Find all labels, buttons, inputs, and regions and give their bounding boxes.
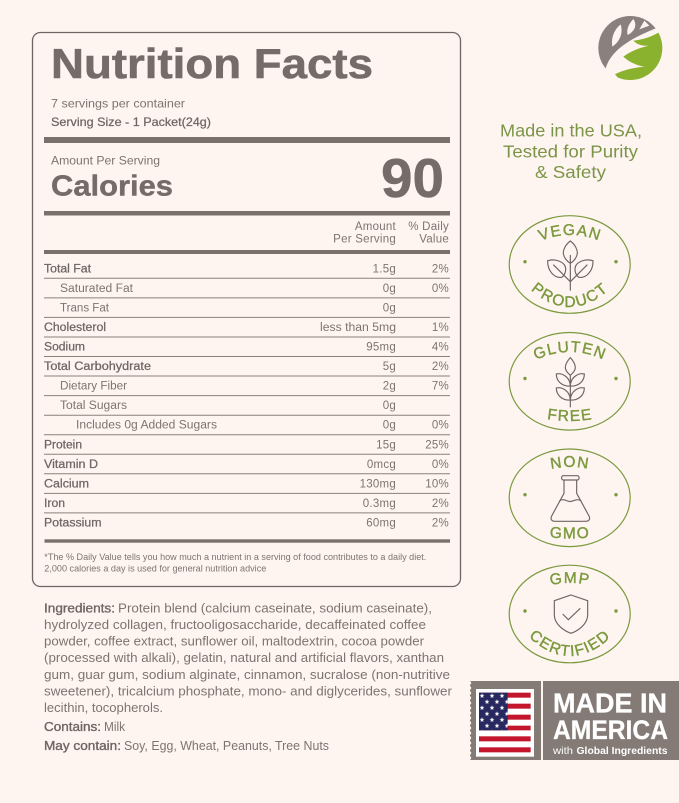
with global ingredients: Global Ingredients	[576, 746, 668, 757]
icon: brand logo	[598, 16, 662, 80]
nutrient table: 2g	[383, 381, 396, 393]
ingredients text: (processed with alkali), gelatin, natural and artificial flavors, xanthan	[44, 651, 444, 665]
nutrient table: 0%	[432, 420, 449, 432]
thick divider	[44, 250, 450, 254]
badge: gmp certified: GMP	[550, 572, 589, 584]
ingredients text: sweetener), tricalcium phosphate, mono- and diglycerides, sunflower	[44, 684, 452, 698]
nutrient table: Total Carbohydrate	[44, 361, 151, 373]
nutrient table: 0g	[383, 283, 396, 295]
icon: flask	[551, 476, 590, 521]
nutrient table: 95mg	[366, 342, 396, 354]
nutrient table: 2%	[432, 263, 449, 275]
amount per serving: Amount Per Serving	[51, 153, 160, 167]
banner: made in america	[470, 681, 679, 760]
badge: gluten free	[508, 332, 631, 431]
ingredients text: Protein blend (calcium caseinate, sodium caseinate),	[118, 601, 432, 615]
nutrient table: Sodium	[44, 342, 85, 354]
nutrient table: 2%	[432, 361, 449, 373]
column header: percent daily value	[408, 221, 449, 245]
nutrient table: less than 5mg	[320, 322, 396, 334]
badge: non gmo: GMO	[550, 526, 588, 539]
nutrient table: 10%	[425, 478, 449, 490]
tagline: Tested for Purity	[503, 142, 638, 162]
column header: percent daily value: % Daily	[408, 221, 449, 233]
column header: amount per serving	[333, 221, 397, 245]
made in: MADE IN	[553, 688, 667, 719]
ingredients text: Soy, Egg, Wheat, Peanuts, Tree Nuts	[124, 739, 329, 753]
servings per container: 7 servings per container	[51, 97, 185, 111]
nutrient table: Total Sugars	[60, 400, 127, 412]
thick divider	[44, 137, 450, 143]
panel: nutrition facts	[32, 32, 460, 586]
nutrient table: Includes 0g Added Sugars	[76, 420, 217, 432]
badge: vegan product: PRODUCT	[531, 282, 606, 308]
column header: percent daily value: Value	[419, 233, 449, 245]
ingredients text: hydrolyzed collagen, fructooligosaccharide, decaffeinated coffee	[44, 618, 426, 632]
nutrient table: 0g	[383, 302, 396, 314]
nutrient table: 0%	[432, 459, 449, 471]
nutrient table: Potassium	[44, 518, 102, 530]
nutrient table: 25%	[425, 439, 449, 451]
ingredients text: May contain:	[44, 739, 121, 753]
serving size: Serving Size - 1 Packet(24g)	[51, 115, 211, 129]
column header: amount per serving: Per Serving	[333, 233, 396, 245]
tagline: Made in the USA,	[500, 121, 642, 141]
tagline: & Safety	[535, 162, 606, 182]
nutrient table: 5g	[383, 361, 396, 373]
icon: leaves	[548, 241, 593, 291]
badge: non gmo: NON	[550, 456, 588, 469]
icon: american flag	[476, 689, 534, 757]
badge: vegan product: VEGAN	[536, 224, 601, 240]
thick divider	[44, 539, 450, 543]
icon: shield check	[554, 595, 588, 633]
tagline	[500, 121, 642, 182]
footnote: *The % Daily Value tells you how much a nutrient in a serving of food contributes to a daily diet.	[44, 552, 426, 562]
badge: gmp certified: CERTIFIED	[530, 630, 608, 656]
ingredients text: Milk	[104, 720, 126, 734]
nutrient table: Calcium	[44, 478, 89, 490]
column header: amount per serving: Amount	[355, 221, 397, 233]
nutrient table: 1%	[432, 322, 449, 334]
ingredients text: gum, guar gum, sodium alginate, cinnamon, sucralose (non-nutritive	[44, 668, 450, 682]
nutrient table: Dietary Fiber	[60, 381, 127, 393]
badge: vegan product	[508, 215, 631, 314]
calories value: 90	[381, 147, 444, 209]
footnote	[44, 552, 426, 574]
badge: gmp certified	[508, 564, 631, 664]
nutrient table: 4%	[432, 342, 449, 354]
america: AMERICA	[553, 715, 668, 745]
badge: gluten free: FREE	[548, 408, 592, 422]
nutrient table: Saturated Fat	[60, 283, 134, 295]
nutrient table: Trans Fat	[60, 302, 110, 314]
badge: gluten free: GLUTEN	[534, 340, 606, 360]
nutrient table: 60mg	[366, 518, 396, 530]
nutrient table	[44, 263, 450, 530]
badge: non gmo	[508, 448, 631, 548]
calories label: Calories	[51, 171, 173, 203]
footnote: 2,000 calories a day is used for general nutrition advice	[44, 564, 266, 574]
ingredients text: Ingredients:	[44, 601, 115, 615]
nutrient table: Iron	[44, 498, 65, 510]
ingredients text: lecithin, tocopherols.	[44, 701, 163, 715]
nutrient table: Cholesterol	[44, 322, 106, 334]
nutrient table: Protein	[44, 439, 82, 451]
nutrient table: 0g	[383, 420, 396, 432]
heading: Nutrition Facts: Nutrition Facts	[51, 40, 373, 87]
ingredients text: powder, coffee extract, sunflower oil, maltodextrin, cocoa powder	[44, 634, 424, 648]
nutrient table: 130mg	[360, 478, 396, 490]
nutrient table: 15g	[376, 439, 396, 451]
nutrient table: 2%	[432, 498, 449, 510]
nutrient table: 0%	[432, 283, 449, 295]
nutrient table: 1.5g	[373, 263, 396, 275]
nutrient table: 7%	[432, 381, 449, 393]
nutrient table: 0.3mg	[363, 498, 396, 510]
ingredients text	[44, 601, 452, 753]
thick divider	[44, 211, 450, 216]
nutrient table: 0mcg	[367, 459, 396, 471]
nutrient table: 2%	[432, 518, 449, 530]
icon: wheat	[556, 358, 584, 407]
ingredients text: Contains:	[44, 720, 101, 734]
nutrient table: Total Fat	[44, 263, 92, 275]
with global ingredients: with	[552, 746, 573, 757]
nutrient table: 0g	[383, 400, 396, 412]
nutrient table: Vitamin D	[44, 459, 98, 471]
